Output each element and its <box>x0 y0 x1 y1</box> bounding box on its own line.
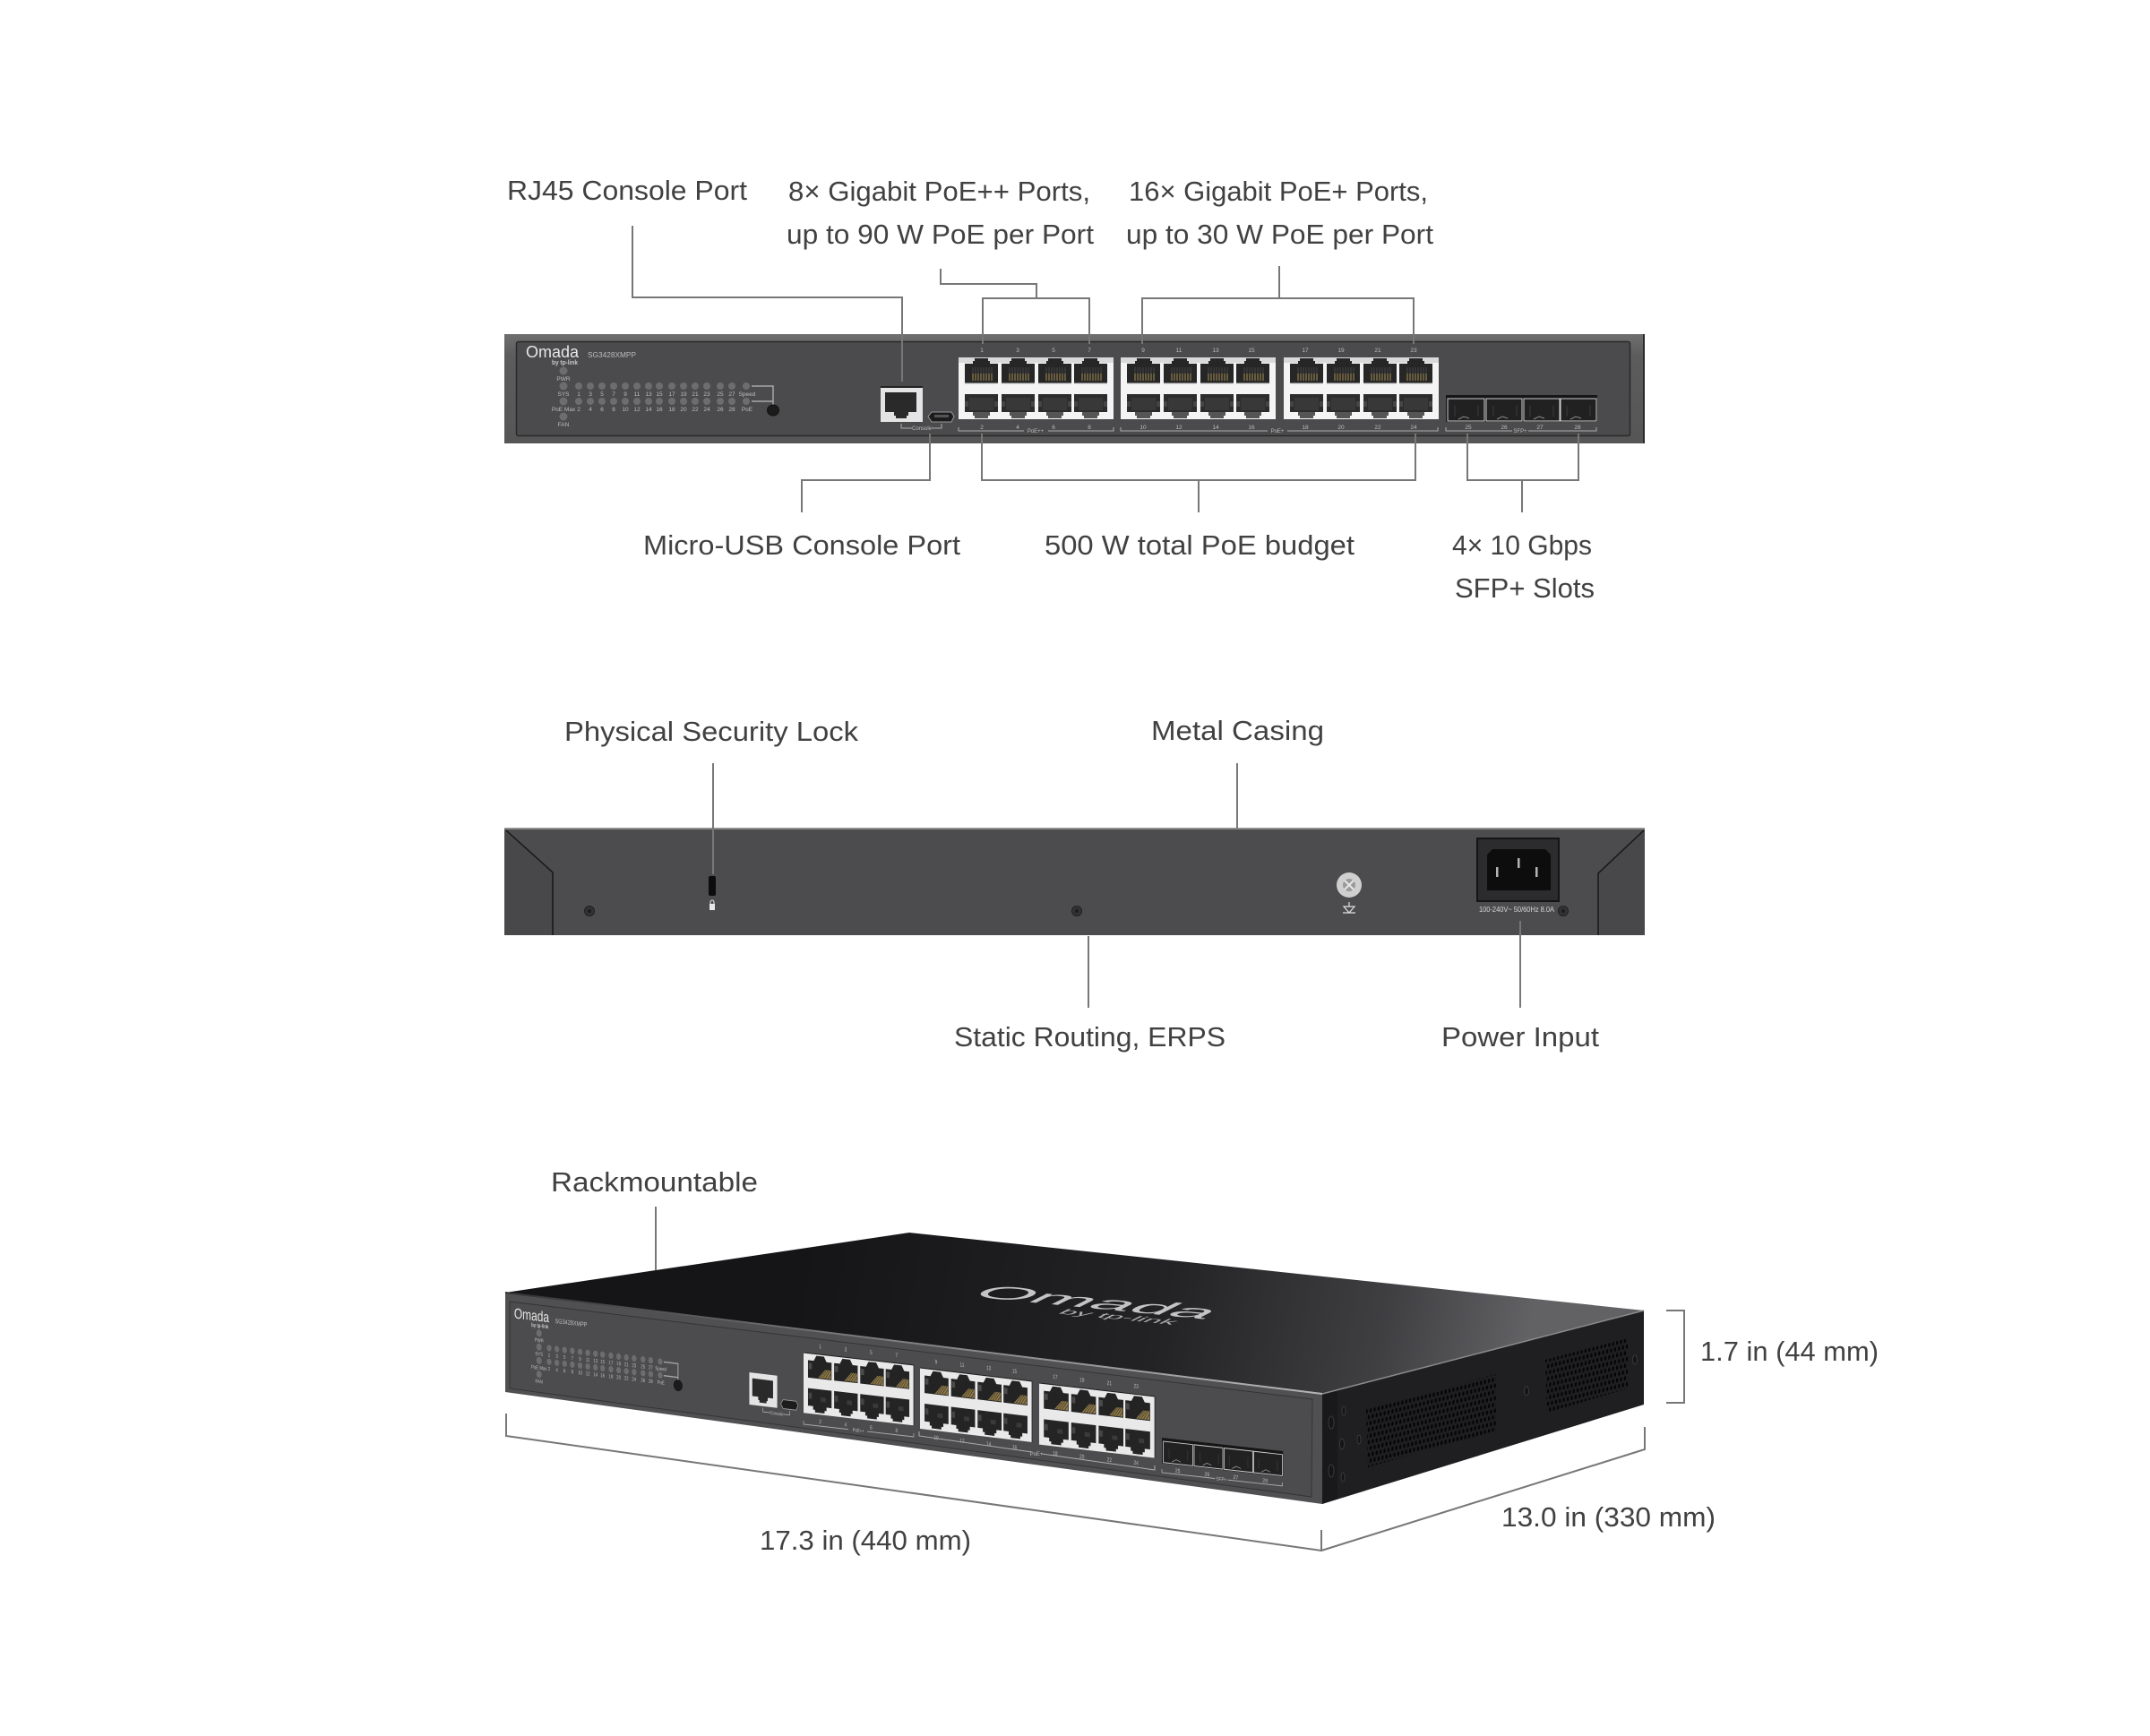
3D brand, LEDs and console: 17 <box>609 1360 613 1367</box>
SFP+ slots: 25 <box>1465 425 1472 431</box>
3D brand, LEDs and console: 4 <box>555 1368 558 1374</box>
3D port block 3: 20 <box>1079 1454 1084 1461</box>
3D side vent front <box>1366 1374 1496 1467</box>
3D port block 3 <box>1039 1373 1155 1469</box>
port block 2: 9 <box>1141 348 1145 354</box>
leader: power input <box>1519 921 1521 1008</box>
screw right <box>1559 907 1568 915</box>
power socket <box>1477 838 1559 901</box>
3D brand, LEDs and console: 11 <box>586 1357 589 1364</box>
3D side screws <box>1329 1355 1638 1482</box>
3D port block 2: 15 <box>1012 1369 1017 1375</box>
front brand, status LEDs and console ports: 16 <box>656 407 663 413</box>
right plate edge <box>1643 334 1645 443</box>
3D SFP+ slots: 25 <box>1175 1468 1180 1474</box>
front brand, status LEDs and console ports: 28 <box>728 407 735 413</box>
port block 2: 13 <box>1212 348 1219 354</box>
label: 8 Gigabit PoE++ Ports <box>787 176 1094 250</box>
front brand, status LEDs and console ports: 25 <box>717 391 724 398</box>
front brand, status LEDs and console ports: 9 <box>624 391 627 398</box>
3D brand, LEDs and console: 1 <box>548 1353 550 1359</box>
dimension: depth line <box>1321 1427 1645 1551</box>
screw center <box>1071 907 1082 915</box>
label: RJ45 Console Port: RJ45 Console Port <box>507 175 747 206</box>
security lock slot <box>709 876 716 910</box>
3D SFP+ slots: 28 <box>1262 1478 1268 1484</box>
3D port block 1: PoE++ <box>853 1428 864 1435</box>
leader: total PoE budget <box>982 434 1415 512</box>
SFP+ slots <box>1446 395 1597 431</box>
3D brand, LEDs and console: SG3428XMPP <box>555 1318 587 1329</box>
front brand, status LEDs and console ports: 5 <box>600 391 604 398</box>
front brand, status LEDs and console ports: 13 <box>645 391 652 398</box>
front brand, status LEDs and console ports: FAN <box>558 422 570 428</box>
3D port block 1: 4 <box>845 1422 847 1429</box>
front brand, status LEDs and console ports: 4 <box>589 407 592 413</box>
3D brand, LEDs and console: PoE <box>658 1379 665 1387</box>
3D port block 1: 7 <box>896 1353 898 1359</box>
port block 2 <box>1121 348 1276 431</box>
3D top face <box>505 1233 1644 1394</box>
3D port block 2: 16 <box>1012 1445 1017 1451</box>
leader: security lock <box>712 763 714 874</box>
3D brand, LEDs and console: Speed <box>655 1366 666 1373</box>
rear switch panel <box>504 828 1645 935</box>
3D port block 3: 24 <box>1133 1460 1140 1467</box>
port block 3: 24 <box>1410 425 1417 431</box>
3D brand, LEDs and console: 22 <box>624 1376 629 1382</box>
leader: PoE++ ports <box>941 269 1089 344</box>
3D port block 3: 18 <box>1053 1451 1058 1457</box>
front brand, status LEDs and console ports: 14 <box>645 407 652 413</box>
label: Metal Casing: Metal Casing <box>1151 715 1324 746</box>
leader: static routing <box>1088 936 1089 1008</box>
port block 3: 19 <box>1337 348 1345 354</box>
3D port block 2: 13 <box>986 1365 991 1372</box>
3D brand, LEDs and console: PoE Max <box>531 1364 547 1372</box>
3D brand, LEDs and console: 6 <box>563 1369 566 1375</box>
front brand, status LEDs and console ports: 3 <box>589 391 592 398</box>
SFP+ slots: 26 <box>1501 425 1508 431</box>
front brand, status LEDs and console ports: 23 <box>703 391 710 398</box>
leader: metal casing <box>1236 763 1238 829</box>
front switch panel <box>504 334 1645 443</box>
3D brand, LEDs and console: 21 <box>624 1362 629 1369</box>
front brand, status LEDs and console ports: PWR <box>556 376 571 382</box>
leader: SFP+ slots <box>1467 434 1578 512</box>
label: Rackmountable: Rackmountable <box>551 1166 758 1198</box>
front brand, status LEDs and console ports: 2 <box>577 407 580 413</box>
front brand, status LEDs and console ports: 12 <box>633 407 641 413</box>
label: 16 Gigabit PoE+ Ports <box>1126 176 1433 250</box>
front brand, status LEDs and console ports: 17 <box>668 391 675 398</box>
front brand, status LEDs and console ports: 11 <box>634 391 641 398</box>
label: 16 Gigabit PoE+ Ports: 16× Gigabit PoE+ Ports, <box>1129 176 1428 207</box>
3D brand, LEDs and console: 26 <box>641 1378 645 1384</box>
3D brand, LEDs and console: 16 <box>600 1373 605 1379</box>
rear top edge <box>504 828 1645 829</box>
3D front inner panel <box>510 1302 1312 1497</box>
3D brand, LEDs and console: 10 <box>578 1371 582 1377</box>
grounding screw <box>1337 872 1362 913</box>
3D brand, LEDs and console: 27 <box>649 1365 653 1371</box>
label: height: 1.7 in (44 mm) <box>1700 1336 1879 1367</box>
port block 2: 15 <box>1248 348 1255 354</box>
front brand, status LEDs and console ports: 27 <box>728 391 735 398</box>
front brand, status LEDs and console ports: SG3428XMPP <box>588 351 636 359</box>
3D brand, LEDs and console: Omada <box>514 1306 549 1327</box>
label: Physical Security Lock: Physical Security Lock <box>564 716 859 747</box>
front brand, status LEDs and console ports <box>526 343 954 432</box>
3D brand, LEDs and console: 2 <box>548 1366 550 1373</box>
port block 3: 17 <box>1302 348 1309 354</box>
front brand, status LEDs and console ports: by tp-link <box>552 360 578 366</box>
label: width: 17.3 in (440 mm) <box>760 1525 971 1556</box>
3D port block 1: 1 <box>819 1345 821 1351</box>
3D brand, LEDs and console: 12 <box>586 1371 590 1378</box>
port block 2: 10 <box>1140 425 1147 431</box>
3D side top edge highlight <box>1322 1311 1644 1394</box>
3D brand, LEDs and console: FAN <box>536 1379 543 1386</box>
3D brand, LEDs and console: 5 <box>563 1354 566 1361</box>
3D SFP+ slots: SFP+ <box>1216 1476 1226 1483</box>
3D port block 3: 17 <box>1053 1374 1058 1381</box>
dimension: width line <box>506 1414 1321 1551</box>
leader: PoE+ ports <box>1142 266 1414 344</box>
3D brand, LEDs and console: SYS <box>535 1351 544 1358</box>
label: 8 Gigabit PoE++ Ports: up to 90 W PoE per Port <box>787 219 1094 250</box>
3D port block 1: 6 <box>870 1425 873 1431</box>
rear left wing <box>504 829 553 935</box>
3D brand, LEDs and console: 3 <box>555 1354 558 1360</box>
label: 500 W total PoE budget: 500 W total PoE budget <box>1045 529 1354 561</box>
3D SFP+ slots: 27 <box>1234 1475 1238 1482</box>
3D brand, LEDs and console: 15 <box>600 1359 605 1366</box>
3D SFP+ slots: 26 <box>1205 1472 1209 1478</box>
3D brand, LEDs and console: 9 <box>579 1356 581 1362</box>
port block 1: 3 <box>1016 348 1019 354</box>
3D brand, LEDs and console: 14 <box>593 1372 598 1379</box>
port block 1 <box>959 348 1114 431</box>
3D brand, LEDs and console <box>514 1306 798 1420</box>
front brand, status LEDs and console ports: Omada <box>526 343 580 361</box>
3D port block 2: 9 <box>935 1360 937 1366</box>
port block 3 <box>1284 348 1439 431</box>
3D brand, LEDs and console: 24 <box>632 1377 636 1383</box>
3D top logo: by tp-link <box>1054 1308 1183 1326</box>
label: SFP+ slots: SFP+ Slots <box>1455 572 1595 604</box>
3D brand, LEDs and console: 25 <box>641 1364 645 1371</box>
3D port block 3: 23 <box>1133 1384 1139 1390</box>
front brand, status LEDs and console ports: 20 <box>680 407 687 413</box>
3D port block 2: 10 <box>933 1435 939 1442</box>
port block 1: 2 <box>980 425 984 431</box>
port block 3: 18 <box>1302 425 1309 431</box>
front inner panel <box>516 342 1630 435</box>
front brand, status LEDs and console ports: PoE Max <box>552 407 576 413</box>
label: Static Routing, ERPS: Static Routing, ERPS <box>954 1021 1226 1053</box>
label: Power Input: Power Input <box>1441 1021 1599 1053</box>
port block 3: 21 <box>1374 348 1381 354</box>
3D front top edge highlight <box>505 1293 1322 1394</box>
front brand, status LEDs and console ports: 6 <box>600 407 604 413</box>
3D top logo: Omada <box>962 1282 1233 1323</box>
port block 1: 6 <box>1052 425 1055 431</box>
3D brand, LEDs and console: 7 <box>572 1355 573 1362</box>
leader: rackmountable <box>655 1207 657 1270</box>
front brand, status LEDs and console ports: Speed <box>739 391 756 398</box>
port group brackets: PoE+ <box>1271 429 1285 434</box>
3D port block 2: 14 <box>986 1441 991 1448</box>
3D brand, LEDs and console: Console <box>770 1410 784 1418</box>
front brand, status LEDs and console ports: 7 <box>612 391 615 398</box>
label: 8 Gigabit PoE++ Ports: 8× Gigabit PoE++ Ports, <box>788 176 1090 207</box>
label: Micro-USB Console Port: Micro-USB Console Port <box>643 529 960 561</box>
3D brand, LEDs and console: by tp-link <box>531 1322 549 1331</box>
front brand, status LEDs and console ports: 22 <box>692 407 699 413</box>
screw left <box>584 907 595 915</box>
label: 16 Gigabit PoE+ Ports: up to 30 W PoE per Port <box>1126 219 1433 250</box>
port block 2: 12 <box>1175 425 1182 431</box>
3D port block 2: 11 <box>960 1362 964 1369</box>
3D brand, LEDs and console: PWR <box>535 1337 544 1345</box>
leader: Micro-USB console <box>802 434 930 512</box>
port group brackets: PoE++ <box>1028 429 1045 434</box>
front brand, status LEDs and console ports: 10 <box>622 407 629 413</box>
SFP+ slots: 27 <box>1536 425 1544 431</box>
front brand, status LEDs and console ports: 15 <box>656 391 663 398</box>
3D SFP+ slots <box>1162 1438 1283 1490</box>
port block 3: 20 <box>1337 425 1345 431</box>
3D port block 1: 8 <box>896 1428 898 1434</box>
3D port block 1 <box>804 1343 914 1440</box>
3D brand, LEDs and console: 23 <box>632 1362 636 1370</box>
3D port block 3: 22 <box>1107 1457 1112 1464</box>
port block 1: 1 <box>980 348 984 354</box>
3D side vent rear <box>1545 1338 1628 1413</box>
SFP+ slots: 28 <box>1574 425 1581 431</box>
port group brackets <box>959 427 1596 434</box>
3D port block 3: 19 <box>1079 1378 1084 1384</box>
3D PoE+ bracket: PoE+ <box>1030 1452 1044 1457</box>
front brand, status LEDs and console ports: 19 <box>680 391 687 398</box>
3D side face <box>1322 1311 1644 1504</box>
3D port block 2 <box>920 1358 1032 1453</box>
3D PoE+ bracket <box>919 1431 1155 1470</box>
label: SFP+ slots <box>1452 529 1595 604</box>
front brand, status LEDs and console ports: SYS <box>557 391 570 398</box>
port block 2: 14 <box>1212 425 1219 431</box>
3D port block 1: 5 <box>870 1350 873 1356</box>
front plate <box>504 334 1645 443</box>
3D brand, LEDs and console: 28 <box>649 1379 653 1385</box>
3D brand, LEDs and console: 18 <box>609 1374 613 1380</box>
port group brackets: SFP+ <box>1513 429 1527 434</box>
3D port block 1: 3 <box>845 1347 847 1354</box>
3D switch view <box>505 1233 1644 1504</box>
front brand, status LEDs and console ports: Console <box>912 426 933 432</box>
rear right wing <box>1598 829 1645 935</box>
port block 3: 22 <box>1374 425 1381 431</box>
3D rack ear <box>1322 1390 1337 1504</box>
port block 1: 5 <box>1052 348 1055 354</box>
label: SFP+ slots: 4× 10 Gbps <box>1452 529 1592 561</box>
dimension: height bracket <box>1666 1311 1684 1403</box>
label: depth: 13.0 in (330 mm) <box>1501 1501 1716 1533</box>
3D brand, LEDs and console: 8 <box>572 1370 573 1376</box>
power rating text: 100-240V~ 50/60Hz 8.0A <box>1479 906 1555 914</box>
front brand, status LEDs and console ports: 1 <box>577 391 580 398</box>
port block 1: 4 <box>1016 425 1019 431</box>
front brand, status LEDs and console ports: 24 <box>703 407 710 413</box>
front brand, status LEDs and console ports: 21 <box>692 391 699 398</box>
port block 1: 8 <box>1088 425 1091 431</box>
3D brand, LEDs and console: 13 <box>593 1358 598 1365</box>
3D brand, LEDs and console: 19 <box>616 1361 621 1368</box>
front brand, status LEDs and console ports: 26 <box>717 407 724 413</box>
port block 3: 23 <box>1410 348 1417 354</box>
3D brand, LEDs and console: 20 <box>616 1375 621 1381</box>
front brand, status LEDs and console ports: PoE <box>742 407 753 413</box>
3D port block 1: 2 <box>819 1419 821 1426</box>
3D port block 2: 12 <box>959 1439 965 1445</box>
front brand, status LEDs and console ports: 18 <box>668 407 675 413</box>
port block 1: 7 <box>1088 348 1091 354</box>
leader: RJ45 console <box>632 226 902 382</box>
rear plate <box>504 828 1645 935</box>
port block 2: 11 <box>1176 348 1182 354</box>
3D port block 3: 21 <box>1107 1380 1112 1388</box>
port block 2: 16 <box>1248 425 1255 431</box>
3D front face <box>505 1293 1322 1504</box>
front brand, status LEDs and console ports: 8 <box>612 407 615 413</box>
